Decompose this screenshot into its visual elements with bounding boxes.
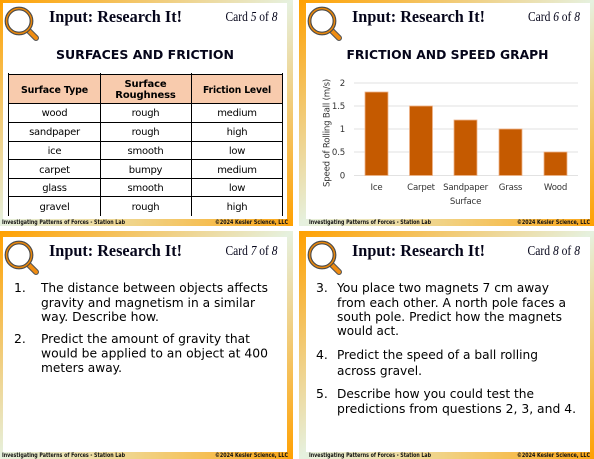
- question 4: [316, 347, 538, 378]
- card 8: questions 3 to 5: [299, 231, 594, 459]
- card heading: Input: Research It!: [49, 7, 182, 26]
- table: Surface: [124, 79, 167, 90]
- question 1: [14, 280, 268, 324]
- table: low: [229, 146, 245, 157]
- bar chart: 1.5: [332, 102, 345, 112]
- bar chart: Ice: [371, 183, 382, 193]
- table: rough: [132, 202, 159, 213]
- card 6: friction and speed graph: [299, 0, 594, 226]
- footer: [309, 453, 590, 459]
- table: smooth: [128, 183, 163, 194]
- bar chart: 2: [340, 79, 345, 89]
- bar chart: 0.5: [332, 148, 345, 158]
- question 2: Predict the amount of gravity that: [41, 331, 250, 346]
- bar chart: Surface: [450, 197, 481, 207]
- table title: SURFACES AND FRICTION: [56, 47, 234, 62]
- icon: magnifying glass: [310, 8, 339, 38]
- question 2: would be applied to an object at 400: [41, 346, 268, 360]
- icon: magnifying glass: [310, 242, 339, 272]
- table: rough: [132, 127, 159, 138]
- table: Roughness: [115, 90, 176, 101]
- footer: Investigating Patterns of Forces - Station Lab: [2, 220, 125, 226]
- question 1: 1.: [14, 280, 26, 295]
- footer: [2, 220, 288, 226]
- question 4: 4.: [316, 347, 328, 362]
- table: high: [227, 202, 247, 213]
- footer: ©2024 Kesler Science, LLC: [215, 220, 288, 226]
- table: Friction Level: [203, 85, 271, 96]
- question 2: [14, 331, 268, 375]
- table: [8, 73, 283, 216]
- chart title: FRICTION AND SPEED GRAPH: [346, 47, 548, 62]
- card 7: questions 1 and 2: [0, 231, 293, 459]
- card 5: surfaces and friction table: [0, 0, 293, 226]
- question 2: 2.: [14, 331, 26, 346]
- question 3: would act.: [337, 323, 399, 338]
- question 5: predictions from questions 2, 3, and 4.: [337, 401, 576, 416]
- question 1: way. Describe how.: [41, 309, 159, 324]
- card number: Card 6 of 8: [528, 10, 580, 25]
- table: medium: [217, 165, 257, 176]
- table: low: [229, 183, 245, 194]
- question 3: from each other. A north pole faces a: [337, 295, 566, 310]
- card heading: Input: Research It!: [352, 241, 485, 260]
- bar chart: Carpet: [407, 183, 436, 193]
- table: ice: [48, 146, 61, 157]
- question 4: Predict the speed of a ball rolling: [337, 347, 538, 362]
- card number: Card 7 of 8: [226, 244, 278, 259]
- table: sandpaper: [29, 127, 81, 138]
- bar chart: 1: [340, 125, 345, 135]
- question 5: [316, 386, 576, 416]
- table: carpet: [39, 165, 70, 176]
- footer: [2, 453, 288, 459]
- question 1: gravity and magnetism in a similar: [41, 295, 256, 310]
- icon: magnifying glass: [6, 242, 36, 272]
- table: glass: [42, 183, 67, 194]
- card heading: Input: Research It!: [49, 241, 182, 260]
- table: medium: [217, 108, 257, 119]
- question 3: 3.: [316, 280, 328, 295]
- footer: [309, 220, 590, 226]
- bar chart: Speed of Rolling Ball (m/s): [322, 79, 332, 187]
- icon: magnifying glass: [6, 8, 36, 38]
- question 4: across gravel.: [337, 363, 422, 378]
- question 2: meters away.: [41, 360, 122, 375]
- question 5: 5.: [316, 386, 328, 401]
- bar chart: Grass: [499, 183, 523, 193]
- bar chart: [322, 79, 578, 207]
- question 3: You place two magnets 7 cm away: [336, 280, 549, 295]
- footer: Investigating Patterns of Forces - Station Lab: [2, 453, 125, 459]
- question 1: The distance between objects affects: [40, 280, 268, 295]
- footer: ©2024 Kesler Science, LLC: [215, 453, 288, 459]
- card heading: Input: Research It!: [352, 7, 485, 26]
- question 3: [316, 280, 566, 338]
- footer: Investigating Patterns of Forces - Station Lab: [309, 220, 431, 226]
- table: Surface Type: [21, 85, 88, 96]
- table: wood: [42, 108, 67, 119]
- table: rough: [132, 108, 159, 119]
- table: smooth: [128, 146, 163, 157]
- question 3: south pole. Predict how the magnets: [337, 309, 562, 324]
- footer: Investigating Patterns of Forces - Station Lab: [309, 453, 431, 459]
- table: gravel: [40, 202, 69, 213]
- question 5: Describe how you could test the: [337, 386, 534, 401]
- card number: Card 8 of 8: [528, 244, 580, 259]
- card number: Card 5 of 8: [226, 10, 278, 25]
- bar chart: 0: [340, 172, 345, 182]
- bar chart: Wood: [544, 183, 567, 193]
- table: high: [227, 127, 247, 138]
- bar chart: Sandpaper: [443, 183, 489, 193]
- table: bumpy: [129, 165, 163, 176]
